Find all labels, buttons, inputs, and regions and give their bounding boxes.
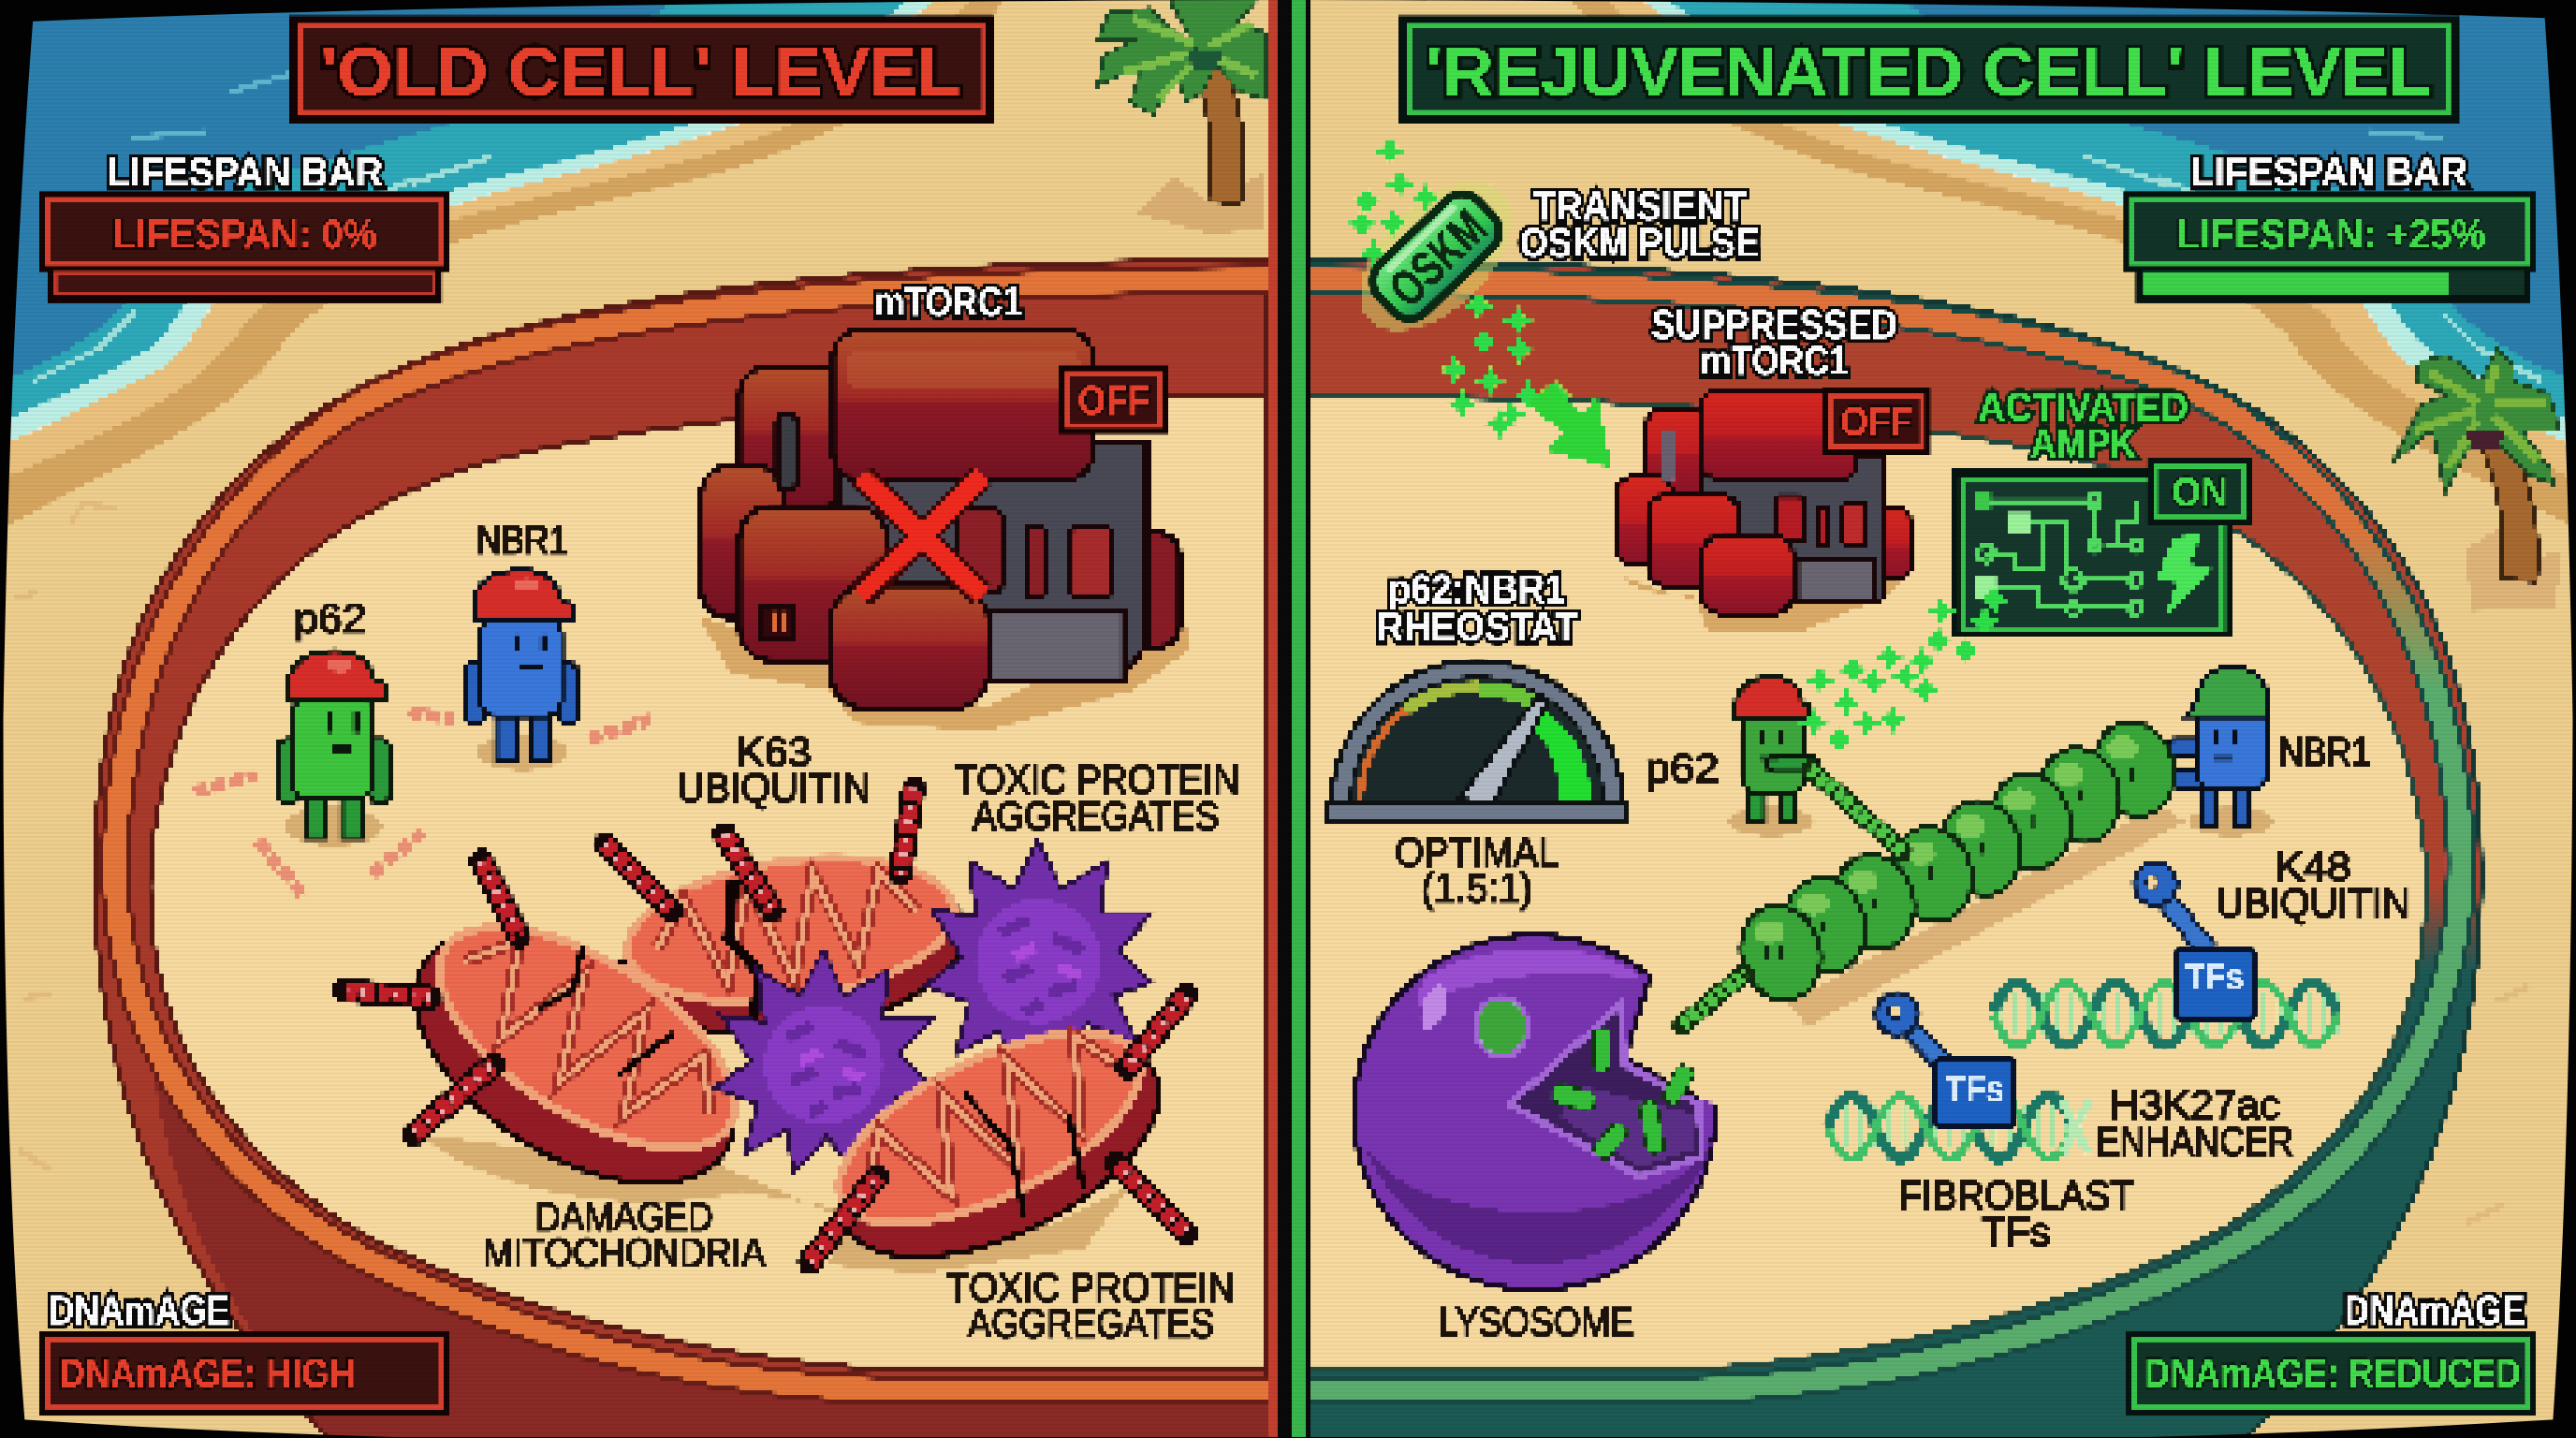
badge: on bbox=[2150, 462, 2249, 522]
lifespan bar: rejuvenated cell bbox=[2128, 149, 2533, 299]
sparkles: OSKM pulse bbox=[1347, 137, 1573, 439]
ubiquitin key: upper bbox=[2134, 862, 2210, 953]
panel: old cell artwork bbox=[17, 0, 1266, 1438]
cell membrane: rejuvenated cell bbox=[1310, 259, 2481, 1438]
badge: off: OFF bbox=[1077, 377, 1150, 423]
DNAmAGE: rejuvenated cell: DNAmAGE: REDUCED bbox=[2144, 1350, 2521, 1396]
DNAmAGE: rejuvenated cell bbox=[2130, 1288, 2533, 1412]
label: fibroblast TFs: TFs bbox=[1982, 1209, 2050, 1255]
DNAmAGE: rejuvenated cell: DNAmAGE bbox=[2345, 1288, 2525, 1334]
badge: on: ON bbox=[2172, 470, 2228, 516]
label: p62 NBR1 rheostat: p62:NBR1 bbox=[1388, 566, 1566, 612]
label: optimal ratio: OPTIMAL bbox=[1395, 829, 1559, 875]
label: H3K27ac enhancer: ENHANCER bbox=[2097, 1119, 2293, 1165]
panel: rejuvenated cell artwork bbox=[1310, 137, 2563, 1438]
lifespan bar: old cell: LIFESPAN: 0% bbox=[112, 212, 377, 257]
center divider bbox=[1266, 0, 1310, 1438]
label: damaged mitochondria bbox=[483, 1195, 767, 1276]
palm tree: left bbox=[1097, 0, 1265, 233]
label: K63 ubiquitin: K63 bbox=[736, 729, 812, 775]
label: activated AMPK: AMPK bbox=[2030, 420, 2136, 466]
mitochondrion: left bbox=[373, 878, 779, 1235]
badge: off bbox=[1063, 370, 1164, 431]
label: fibroblast TFs bbox=[1898, 1173, 2133, 1255]
label: mTORC1: mTORC1 bbox=[874, 279, 1022, 325]
label: toxic protein aggregates upper bbox=[956, 757, 1239, 839]
gauge: rheostat bbox=[1327, 661, 1627, 823]
arrow: OSKM to mTORC1 bbox=[1528, 383, 1612, 468]
label: p62: p62 bbox=[294, 596, 366, 642]
label: activated AMPK: ACTIVATED bbox=[1978, 384, 2188, 430]
label: K48 ubiquitin: K48 bbox=[2276, 844, 2351, 890]
background: left ocean and shoreline bbox=[0, 0, 1005, 529]
character: NBR1 bbox=[465, 570, 577, 770]
character: NBR1 green hat bbox=[2169, 668, 2274, 836]
label: fibroblast TFs: FIBROBLAST bbox=[1898, 1173, 2133, 1219]
aggregate: purple left bbox=[714, 949, 931, 1173]
ubiquitin chain: green bbox=[1682, 769, 1902, 1025]
label: damaged mitochondria: DAMAGED bbox=[535, 1195, 713, 1240]
panel: AMPK circuit board bbox=[1956, 473, 2228, 634]
DNA: lower bbox=[1827, 1096, 2089, 1158]
DNAmAGE: old cell: DNAmAGE: HIGH bbox=[59, 1350, 355, 1396]
sand patches bbox=[17, 503, 115, 1170]
label: damaged mitochondria: MITOCHONDRIA bbox=[483, 1230, 767, 1276]
lifespan bar: old cell bbox=[43, 149, 446, 299]
background: right ocean and shoreline bbox=[1571, 0, 2576, 529]
badge: off suppressed bbox=[1825, 391, 1927, 452]
label: toxic protein aggregates lower bbox=[947, 1265, 1235, 1347]
sand patches bbox=[2465, 986, 2530, 1225]
label: toxic protein aggregates upper: AGGREGATES bbox=[973, 793, 1219, 839]
sand shadows under the cluster bbox=[419, 1134, 1134, 1273]
aggregate: purple right bbox=[925, 841, 1152, 1075]
character: p62 bbox=[279, 651, 389, 846]
label: activated AMPK bbox=[1978, 384, 2188, 466]
title: rejuvenated cell level: 'REJUVENATED CELL' LEVEL bbox=[1426, 33, 2432, 110]
label: transient OSKM pulse: OSKM PULSE bbox=[1519, 220, 1760, 266]
label: K63 ubiquitin bbox=[677, 729, 871, 811]
icon: lightning bolt bbox=[2157, 534, 2211, 618]
protein chain: green beads bbox=[1731, 712, 2185, 1027]
lifespan bar: rejuvenated cell: LIFESPAN BAR bbox=[2191, 149, 2467, 195]
badge: off suppressed: OFF bbox=[1840, 399, 1912, 445]
DNAmAGE: old cell: DNAmAGE bbox=[50, 1288, 230, 1334]
mitochondrion: upper bbox=[610, 838, 975, 1055]
DNAmAGE: old cell bbox=[43, 1288, 446, 1412]
circuit traces bbox=[1978, 494, 2143, 614]
label: p62 NBR1 rheostat: RHEOSTAT bbox=[1377, 604, 1577, 650]
label: K48 ubiquitin bbox=[2217, 844, 2410, 926]
title: old cell level bbox=[294, 20, 990, 120]
label: transient OSKM pulse bbox=[1519, 183, 1760, 266]
ubiquitin key: lower bbox=[1876, 992, 1958, 1078]
label: NBR1 right: NBR1 bbox=[2278, 729, 2371, 775]
ubiquitin chains: red bbox=[345, 788, 1186, 1262]
label: suppressed mTORC1 bbox=[1651, 302, 1897, 384]
icon: red X over mTORC1 bbox=[861, 477, 983, 594]
label: toxic protein aggregates lower: TOXIC PROTEIN bbox=[947, 1265, 1235, 1311]
glow: OSKM pill bbox=[1333, 154, 1539, 358]
label: H3K27ac enhancer bbox=[2097, 1082, 2293, 1165]
TF box upper bbox=[2177, 949, 2254, 1019]
lysosome bbox=[1354, 935, 1719, 1290]
TF box lower: TFs bbox=[1945, 1069, 2004, 1109]
label: K48 ubiquitin: UBIQUITIN bbox=[2217, 880, 2410, 926]
label: toxic protein aggregates lower: AGGREGATES bbox=[968, 1301, 1214, 1347]
lifespan bar: old cell: LIFESPAN BAR bbox=[107, 149, 383, 195]
title: old cell level: 'OLD CELL' LEVEL bbox=[320, 33, 961, 110]
label: K63 ubiquitin: UBIQUITIN bbox=[677, 765, 871, 811]
label: H3K27ac enhancer: H3K27ac bbox=[2110, 1082, 2280, 1128]
label: transient OSKM pulse: TRANSIENT bbox=[1533, 183, 1747, 229]
character: p62 red hat bbox=[1728, 677, 1817, 836]
damaged mitochondria and aggregates cluster bbox=[345, 788, 1193, 1301]
TF box upper: TFs bbox=[2185, 958, 2244, 998]
mitochondrion: lower bbox=[804, 990, 1193, 1301]
DNA: upper bbox=[1993, 983, 2343, 1045]
engulfed protein fragments bbox=[1551, 1029, 1696, 1162]
TF box lower bbox=[1936, 1060, 2014, 1125]
cell membrane: old cell bbox=[95, 259, 1266, 1438]
machine: mTORC1 bbox=[698, 330, 1191, 731]
pill: OSKM: OSKM bbox=[1379, 200, 1498, 317]
label: p62 right: p62 bbox=[1646, 745, 1720, 791]
label: suppressed mTORC1: mTORC1 bbox=[1701, 338, 1848, 384]
sparkles: AMPK energy bbox=[1799, 585, 2009, 755]
label: suppressed mTORC1: SUPPRESSED bbox=[1651, 302, 1897, 348]
lifespan bar: rejuvenated cell: LIFESPAN: +25% bbox=[2177, 212, 2485, 257]
label: toxic protein aggregates upper: TOXIC PROTEIN bbox=[956, 757, 1239, 803]
machine: suppressed mTORC1 bbox=[1617, 391, 1919, 633]
palm tree: right bbox=[2392, 350, 2563, 611]
label: optimal ratio: (1.5:1) bbox=[1421, 866, 1533, 912]
label: lysosome: LYSOSOME bbox=[1439, 1299, 1633, 1345]
faded ubiquitin chains bbox=[194, 712, 651, 897]
label: optimal ratio bbox=[1395, 829, 1559, 912]
label: p62 NBR1 rheostat bbox=[1377, 566, 1577, 650]
label: NBR1: NBR1 bbox=[476, 517, 568, 563]
